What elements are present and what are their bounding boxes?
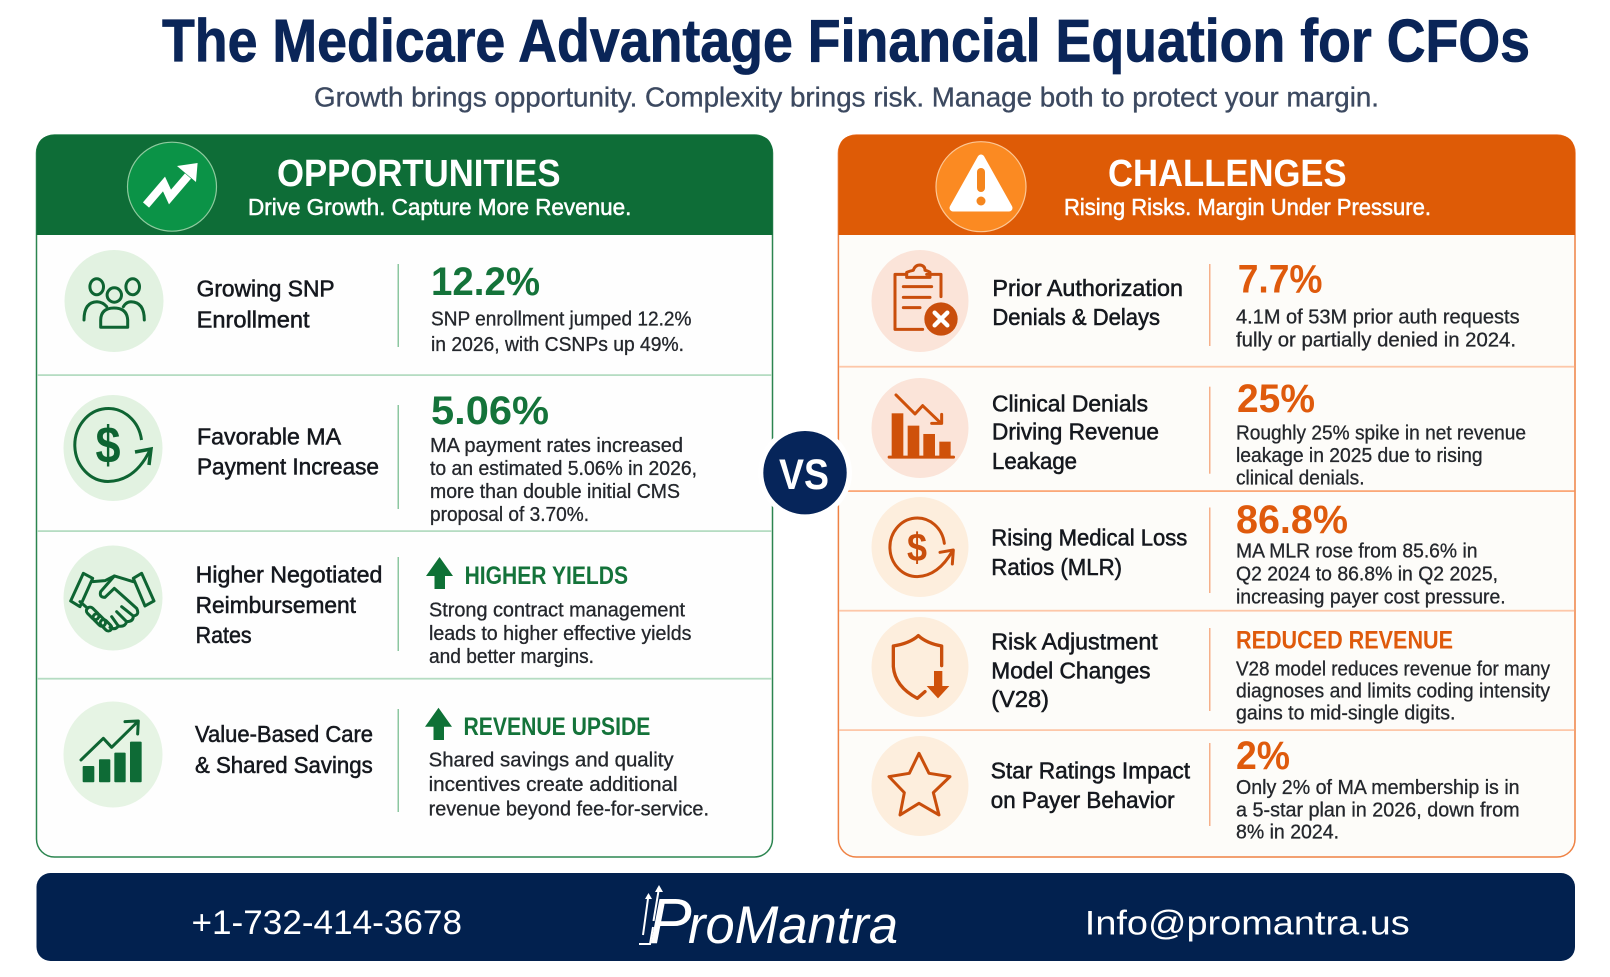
- label: [991, 628, 1158, 712]
- panel: opportunities: [36, 135, 773, 857]
- logo: ProMantra: [639, 885, 898, 957]
- label: [197, 424, 379, 479]
- opportunities tagline: Drive Growth. Capture More Revenue.: [248, 194, 631, 220]
- icon: dollar cycle: [64, 395, 162, 501]
- logo: ProMantra: P: [649, 885, 692, 957]
- icon: star: [872, 736, 968, 836]
- icon: clipboard with X: [872, 250, 968, 352]
- stat: 86.8%: [1236, 498, 1348, 542]
- label: (V28): [991, 686, 1049, 712]
- label: Model Changes: [991, 658, 1150, 684]
- description: Only 2% of MA membership is in: [1236, 777, 1520, 799]
- description: Q2 2024 to 86.8% in Q2 2025,: [1236, 563, 1498, 585]
- stat: 12.2%: [431, 260, 540, 304]
- logo: ProMantra: roMantra: [688, 896, 898, 955]
- stat: 25%: [1237, 377, 1315, 421]
- description: [1236, 540, 1506, 608]
- label: Favorable MA: [197, 424, 342, 450]
- description: [1236, 306, 1520, 352]
- label: Denials & Delays: [992, 304, 1160, 330]
- row: value-based care and shared savings: [64, 702, 709, 821]
- label: Higher Negotiated: [196, 562, 382, 588]
- row: risk adjustment model changes: [872, 617, 1550, 724]
- label: Driving Revenue: [992, 419, 1159, 445]
- description: to an estimated 5.06% in 2026,: [430, 458, 697, 480]
- label: Risk Adjustment: [991, 628, 1158, 654]
- label: Rising Medical Loss: [991, 524, 1187, 550]
- description: 8% in 2024.: [1236, 822, 1339, 844]
- subtitle: Growth brings opportunity. Complexity brings risk. Manage both to protect your margin.: [314, 82, 1379, 113]
- description: [429, 750, 709, 821]
- icon: dollar cycle: $: [907, 526, 927, 570]
- icon: up arrow: [426, 557, 453, 589]
- label: [992, 275, 1183, 330]
- email address: Info@promantra.us: [1085, 904, 1410, 942]
- description: 4.1M of 53M prior auth requests: [1236, 306, 1520, 328]
- icon: dollar cycle: $: [96, 416, 121, 474]
- description: [1236, 658, 1550, 724]
- label: Reimbursement: [196, 592, 357, 618]
- description: MA MLR rose from 85.6% in: [1236, 540, 1478, 562]
- description: [431, 309, 692, 356]
- callout heading: HIGHER YIELDS: [465, 562, 628, 590]
- icon: handshake: [64, 546, 162, 650]
- description: leads to higher effective yields: [429, 623, 692, 645]
- challenges tagline: Rising Risks. Margin Under Pressure.: [1064, 194, 1431, 220]
- description: Strong contract management: [429, 600, 685, 622]
- callout heading: REDUCED REVENUE: [1236, 626, 1453, 654]
- label: [992, 391, 1159, 474]
- footer bar: [36, 873, 1575, 961]
- row: favorable MA payment increase: [64, 389, 697, 526]
- panel: challenges: [838, 135, 1575, 857]
- label: Rates: [196, 622, 252, 648]
- icon: shield with down arrow: [872, 617, 968, 717]
- label: Growing SNP: [197, 276, 335, 302]
- description: revenue beyond fee-for-service.: [429, 799, 709, 821]
- challenges header band: [838, 135, 1575, 235]
- label: [195, 721, 373, 778]
- description: Roughly 25% spike in net revenue: [1236, 422, 1526, 444]
- description: SNP enrollment jumped 12.2%: [431, 309, 692, 331]
- icon: people group: [64, 250, 164, 352]
- VS badge: VS: [779, 451, 829, 499]
- row: higher negotiated reimbursement rates: [64, 546, 692, 668]
- description: clinical denials.: [1236, 467, 1364, 489]
- description: Shared savings and quality: [429, 750, 674, 772]
- stat: 5.06%: [431, 389, 549, 433]
- description: [429, 600, 692, 668]
- description: in 2026, with CSNPs up 49%.: [431, 334, 684, 356]
- description: [430, 435, 697, 526]
- description: and better margins.: [429, 646, 594, 668]
- icon: falling bar chart: [872, 378, 968, 478]
- description: leakage in 2025 due to rising: [1236, 445, 1483, 467]
- description: incentives create additional: [429, 774, 678, 796]
- label: [197, 276, 335, 333]
- phone number: +1-732-414-3678: [192, 904, 462, 942]
- description: [1236, 422, 1526, 489]
- label: [991, 524, 1187, 580]
- description: fully or partially denied in 2024.: [1236, 330, 1516, 352]
- icon: dollar cycle: [872, 497, 968, 597]
- VS badge: [758, 426, 852, 520]
- label: Star Ratings Impact: [991, 757, 1191, 783]
- description: gains to mid-single digits.: [1236, 702, 1455, 724]
- row: clinical denials revenue leakage: [872, 377, 1526, 489]
- description: proposal of 3.70%.: [430, 504, 589, 526]
- description: MA payment rates increased: [430, 435, 683, 457]
- label: Enrollment: [197, 307, 310, 333]
- description: [1236, 777, 1520, 844]
- challenges heading: CHALLENGES: [1108, 153, 1347, 195]
- row: growing SNP enrollment: [64, 250, 692, 356]
- label: & Shared Savings: [195, 752, 373, 778]
- icon: rising bar chart: [64, 702, 162, 808]
- description: more than double initial CMS: [430, 481, 680, 503]
- callout heading: REVENUE UPSIDE: [464, 713, 650, 741]
- stat: 2%: [1236, 734, 1290, 778]
- description: increasing payer cost pressure.: [1236, 586, 1506, 608]
- label: Clinical Denials: [992, 391, 1148, 417]
- label: [196, 562, 382, 648]
- description: diagnoses and limits coding intensity: [1236, 680, 1550, 702]
- icon: growth arrow: [128, 142, 216, 231]
- label: Ratios (MLR): [991, 554, 1122, 580]
- label: Value-Based Care: [195, 721, 373, 747]
- label: Payment Increase: [197, 453, 379, 479]
- opportunities header band: [36, 135, 773, 235]
- label: [991, 757, 1191, 813]
- opportunities heading: OPPORTUNITIES: [277, 153, 561, 195]
- label: Leakage: [992, 448, 1077, 474]
- icon: warning triangle: [936, 142, 1026, 232]
- row: prior authorization denials: [872, 250, 1520, 352]
- label: Prior Authorization: [992, 275, 1183, 301]
- description: a 5-star plan in 2026, down from: [1236, 799, 1520, 821]
- description: V28 model reduces revenue for many: [1236, 658, 1550, 680]
- row: rising medical loss ratios: [872, 497, 1506, 608]
- label: on Payer Behavior: [991, 787, 1175, 813]
- row: star ratings impact: [872, 734, 1520, 844]
- icon: up arrow: [425, 708, 452, 740]
- stat: 7.7%: [1238, 258, 1322, 302]
